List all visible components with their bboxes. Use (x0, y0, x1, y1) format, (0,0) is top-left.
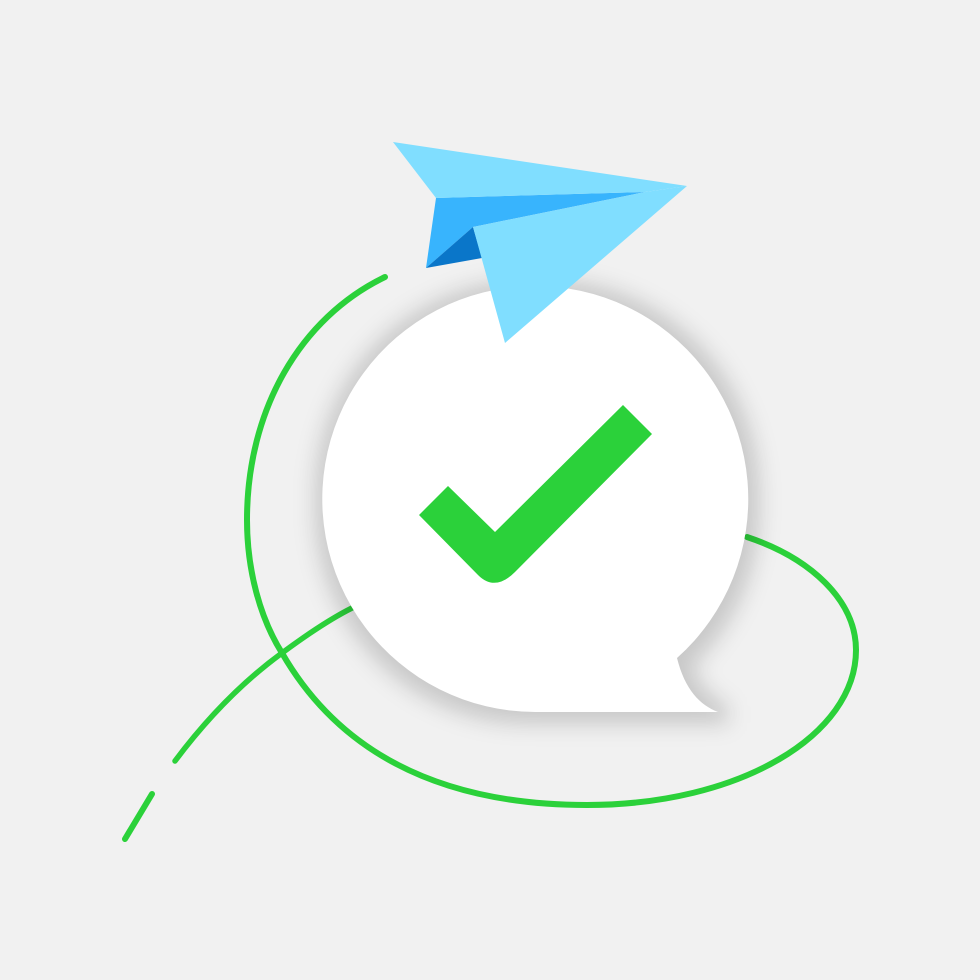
icon: check mark (419, 405, 652, 583)
plane: dark fold (426, 227, 482, 268)
flight path: trailing dash (125, 794, 152, 839)
plane: lower wing (473, 186, 687, 343)
bubble shadow (324, 289, 750, 715)
icon: paper plane (393, 142, 687, 343)
flight path: trailing line (175, 608, 352, 761)
chat bubble (322, 286, 748, 712)
plane: inner fold (426, 192, 645, 268)
flight path: large loop behind the bubble (247, 277, 856, 805)
plane: top wing (393, 142, 687, 198)
